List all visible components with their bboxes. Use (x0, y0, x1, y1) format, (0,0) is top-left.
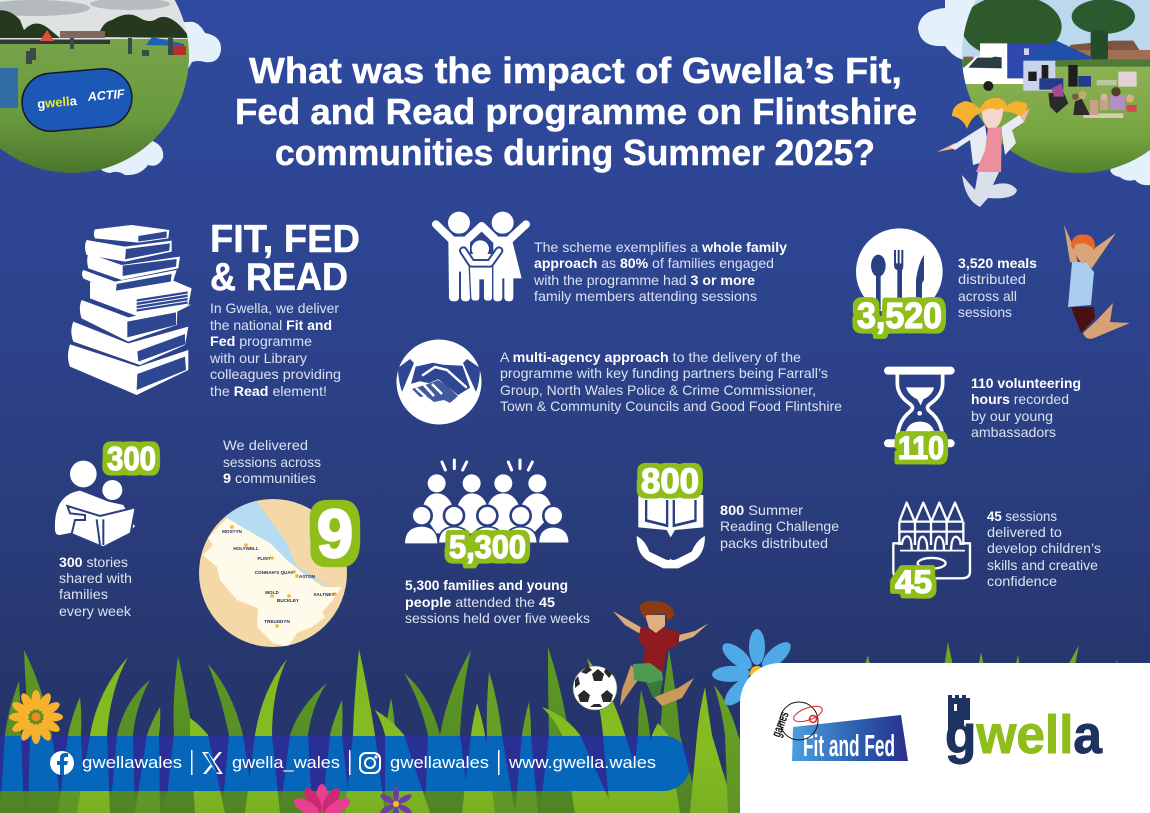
panel: stories (55, 440, 156, 619)
intro text: the national Fit and (210, 318, 332, 333)
text: sessions held over five weeks (405, 611, 590, 626)
map of Flintshire: FLINT (257, 556, 271, 561)
text: sessions across (223, 455, 321, 470)
icon: orange flower (9, 690, 63, 744)
panel: logos (740, 663, 1150, 813)
panel: communities map (199, 438, 353, 647)
text: ambassadors (971, 425, 1056, 440)
text: shared with (59, 571, 132, 586)
photo: Gwella banner on the field (0, 0, 189, 173)
panel: creative sessions (893, 503, 1101, 600)
title: What was the impact of Gwella’s Fit, (249, 50, 902, 91)
intro text: the Read element! (210, 384, 327, 399)
text (500, 350, 842, 414)
icon: stack of books (68, 225, 192, 395)
icon: plate and cutlery (856, 228, 943, 315)
panel: Fit, Fed & Read intro: & READ (210, 256, 348, 299)
title: Fed and Read programme on Flintshire (235, 91, 917, 132)
photo: Gwella banner on the field: gwella (37, 93, 78, 111)
map of Flintshire: MOSTYN (222, 529, 243, 534)
logo: Fit and Fed: Fit and Fed (803, 728, 895, 763)
text: 9 communities (223, 471, 316, 486)
icon: instagram (360, 753, 380, 773)
text: programme with key funding partners being Farrall’s (500, 366, 828, 381)
heading: FIT, FED (210, 218, 360, 261)
map of Flintshire: TREUDDYN (264, 619, 290, 624)
text: We delivered (223, 438, 308, 453)
text: 300 stories (59, 555, 128, 570)
panel: multi-agency approach (396, 340, 842, 424)
icon: facebook (50, 751, 74, 775)
panel: families attended (405, 460, 590, 626)
intro text: with our Library (209, 351, 307, 366)
text: delivered to (987, 525, 1062, 540)
grass (0, 642, 1122, 813)
icon: blue flower (712, 629, 795, 710)
logo: Fit and Fed: games (768, 709, 792, 739)
map of Flintshire: CONNAH’S QUAY (255, 570, 293, 575)
number: 45 (895, 564, 932, 600)
icon: adult reading with child (55, 461, 136, 547)
clouds (100, 0, 1150, 185)
banner (20, 66, 134, 134)
text: families (59, 587, 108, 602)
text: develop children’s (987, 541, 1101, 556)
text: 5,300 families and young (405, 578, 568, 593)
text: 110 volunteering (971, 376, 1081, 391)
character: boy with football (573, 601, 709, 710)
text: 45 sessions (987, 509, 1057, 524)
map of Flintshire: MOLD (265, 590, 279, 595)
text: by our young (971, 409, 1053, 424)
photo: van and picnic on the field (950, 0, 1150, 180)
photo: Gwella banner on the field: ACTIF (86, 87, 125, 104)
social bar: gwellawales (390, 753, 489, 772)
panel: reading challenge (637, 462, 839, 568)
icon: football (573, 666, 617, 710)
icon: handshake (396, 340, 482, 424)
icon: open book in hands (637, 495, 705, 568)
text: family members attending sessions (534, 289, 757, 304)
map of Flintshire (199, 496, 347, 647)
text: sessions (958, 305, 1012, 320)
text (223, 438, 321, 486)
text: 800 Summer (720, 503, 804, 518)
map of Flintshire: HOLYWELL (233, 546, 259, 551)
panel: meals (856, 228, 1037, 336)
icon: purple flower (379, 786, 413, 813)
text: every week (59, 604, 131, 619)
title (235, 50, 917, 173)
icon: pink flower (291, 784, 353, 813)
icon: crayon box (893, 503, 970, 578)
text: confidence (987, 574, 1057, 589)
text: people attended the 45 (405, 595, 555, 610)
intro text: In Gwella, we deliver (210, 301, 339, 316)
text: distributed (958, 272, 1026, 287)
panel: volunteering hours (884, 367, 1081, 466)
text (987, 509, 1101, 589)
character: girl jumping (937, 98, 1030, 207)
text: approach as 80% of families engaged (534, 256, 774, 271)
logo: Fit and Fed (768, 702, 908, 763)
text: 3,520 meals (958, 256, 1037, 271)
text: across all (958, 289, 1017, 304)
logo: gwella: gwella (945, 705, 1103, 765)
intro text (209, 301, 341, 399)
panel: Fit, Fed & Read intro (68, 218, 360, 399)
text (533, 240, 787, 304)
text: hours recorded (971, 392, 1069, 407)
icon: X (202, 752, 223, 774)
map of Flintshire: ASTON (299, 574, 316, 579)
number: 800 (641, 462, 699, 501)
intro text: Fed programme (210, 334, 312, 349)
text: packs distributed (720, 536, 828, 551)
icon: hourglass (884, 367, 955, 447)
title: communities during Summer 2025? (275, 132, 875, 173)
map of Flintshire: BUCKLEY (277, 598, 299, 603)
text (405, 578, 590, 626)
text: skills and creative (987, 558, 1098, 573)
text: Group, North Wales Police & Crime Commissioner, (500, 383, 816, 398)
number: 9 (317, 496, 353, 572)
intro text: colleagues providing (210, 367, 341, 382)
text: The scheme exemplifies a whole family (534, 240, 787, 255)
social bar: gwella_wales (232, 753, 340, 772)
number: 300 (107, 440, 156, 477)
social bar: www.gwella.wales (508, 753, 656, 772)
text (59, 555, 132, 619)
text (720, 503, 839, 551)
text: Town & Community Councils and Good Food Flintshire (500, 399, 842, 414)
text: Reading Challenge (720, 519, 839, 534)
icon: family (436, 212, 526, 301)
map of Flintshire: SALTNEY (313, 592, 335, 597)
text: with the programme had 3 or more (533, 273, 755, 288)
number: 3,520 (857, 295, 942, 336)
text: A multi-agency approach to the delivery of the (500, 350, 801, 365)
number: 110 (898, 430, 944, 466)
icon: crowd (405, 460, 569, 543)
panel: whole family approach (436, 212, 787, 304)
number: 5,300 (449, 529, 526, 565)
text (971, 376, 1081, 440)
social bar (0, 736, 690, 791)
social bar: gwellawales (82, 753, 182, 772)
text (958, 256, 1037, 320)
character: boy jumping (1064, 225, 1130, 339)
